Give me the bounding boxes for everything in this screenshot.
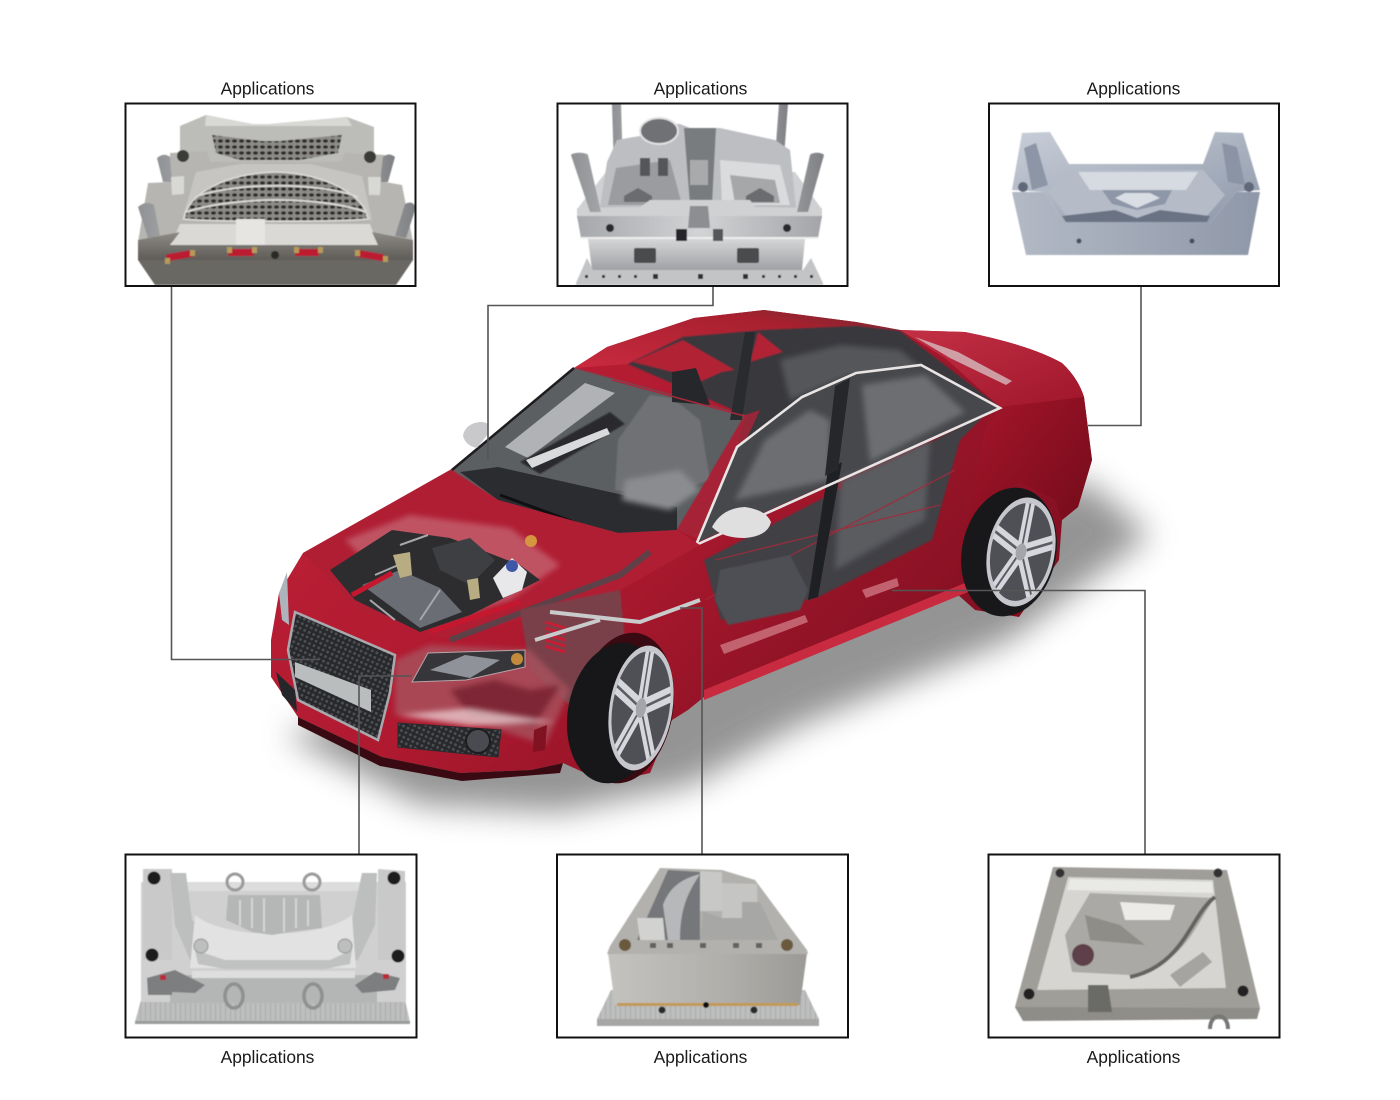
brass fittings xyxy=(165,247,388,264)
main platform xyxy=(138,151,413,242)
mold image xyxy=(135,869,410,1024)
lower block xyxy=(170,975,377,1003)
panel: top right bumper mold xyxy=(989,78,1279,286)
lower door trim xyxy=(720,578,899,654)
corner bushes xyxy=(619,939,631,951)
bumper glow xyxy=(398,708,555,726)
grille xyxy=(288,612,395,740)
frame xyxy=(126,104,416,286)
cabin dark interior behind roof xyxy=(628,326,1000,447)
seam xyxy=(580,237,818,239)
lower slide xyxy=(170,224,378,247)
coolant tank xyxy=(493,558,527,598)
rear headrest and bench xyxy=(780,345,960,400)
heading: Applications xyxy=(654,78,748,98)
roof xyxy=(574,310,900,368)
frame xyxy=(989,104,1279,286)
bolt holes xyxy=(783,224,791,232)
mold image xyxy=(1012,132,1260,255)
hub xyxy=(634,697,648,719)
white backdrop xyxy=(126,104,415,285)
big grille xyxy=(184,172,368,221)
connector bottom left xyxy=(359,676,412,854)
top face strip xyxy=(205,115,352,126)
base plate xyxy=(597,990,819,1026)
frame xyxy=(558,104,848,286)
coil spring xyxy=(545,622,565,652)
lower eye bolts xyxy=(225,984,243,1008)
recess pockets xyxy=(640,158,668,176)
right recess xyxy=(730,175,780,203)
cavity xyxy=(1048,170,1225,218)
centre column xyxy=(684,128,716,205)
top face xyxy=(607,868,808,954)
inner cavity xyxy=(1037,877,1226,990)
front lower face xyxy=(138,260,413,285)
front guide pillars xyxy=(571,153,824,212)
block face xyxy=(608,953,807,1005)
left headlamp sliver xyxy=(279,572,289,625)
hood xyxy=(303,470,700,640)
panel: bottom middle tall mold xyxy=(557,854,848,1038)
plate bolts xyxy=(750,1006,758,1014)
plate edge xyxy=(597,1019,819,1026)
hood cutaway fade xyxy=(345,515,560,625)
mold image xyxy=(597,868,819,1026)
rear quarter panel xyxy=(960,397,1092,560)
windscreen interior xyxy=(452,368,745,533)
block front xyxy=(1012,192,1260,255)
front corner vents xyxy=(533,725,547,752)
platform sides xyxy=(578,172,821,208)
bumper core xyxy=(190,915,356,968)
intake manifold xyxy=(362,570,462,628)
A-pillar red xyxy=(677,410,760,540)
bolt holes xyxy=(146,948,158,962)
panel: bottom right door mold xyxy=(988,854,1280,1038)
connector top left xyxy=(172,286,318,660)
amber indicator xyxy=(511,653,523,665)
cowl lines xyxy=(450,552,650,640)
front upper face xyxy=(138,232,413,260)
rear spoke gaps xyxy=(985,498,1059,597)
square cut-outs xyxy=(713,229,723,241)
red cylinder xyxy=(356,250,384,261)
bumper side mesh xyxy=(276,672,297,712)
red roof patches seen through glass xyxy=(632,332,783,382)
door frame pillar xyxy=(808,462,842,600)
panel: top middle dashboard mold xyxy=(558,78,848,286)
rear window strip xyxy=(915,337,1012,385)
connector bottom middle xyxy=(680,608,702,854)
rear alloy wheel xyxy=(980,495,1062,609)
connector lines xyxy=(172,286,1145,854)
B-pillar through glass xyxy=(825,378,850,476)
front tyre xyxy=(555,634,675,792)
curved highlight xyxy=(663,874,700,940)
corner holes xyxy=(1244,182,1254,192)
red cylinder xyxy=(228,249,254,256)
mold image xyxy=(570,104,824,285)
upper recess xyxy=(226,895,322,935)
core inner right xyxy=(720,160,790,205)
base holes xyxy=(585,274,813,279)
inner structure xyxy=(450,680,560,725)
side window white frame xyxy=(696,365,1000,545)
door core xyxy=(1065,893,1215,975)
purple insert xyxy=(1072,944,1094,966)
heading: Applications xyxy=(221,78,315,98)
corner bores xyxy=(1056,868,1064,878)
main block xyxy=(141,882,406,1002)
windscreen frame xyxy=(452,368,574,470)
left post recess xyxy=(1024,143,1048,190)
dark window recess xyxy=(1085,915,1145,945)
top inner wall xyxy=(1067,879,1213,893)
bumper left wing xyxy=(170,873,225,965)
car shadow xyxy=(285,480,1150,812)
eye bolts top xyxy=(227,874,243,890)
plate bolts xyxy=(703,1002,709,1008)
red engine pipes xyxy=(352,573,520,632)
lower slot trim xyxy=(195,950,352,969)
cavity highlight xyxy=(1078,172,1198,190)
door rear seat glimpse xyxy=(835,440,930,570)
frame xyxy=(988,854,1280,1038)
cavity shadow xyxy=(637,870,700,940)
soft mold artwork xyxy=(571,104,824,285)
core surround xyxy=(600,124,796,208)
lighter column detail xyxy=(690,160,708,185)
lower bumper lip xyxy=(298,717,563,781)
right mirror xyxy=(712,507,771,538)
handling slot xyxy=(634,248,656,263)
corner posts xyxy=(143,869,405,960)
caption bottom middle: Applications xyxy=(654,1047,748,1067)
mold image xyxy=(126,104,416,285)
corner holes xyxy=(1018,182,1028,192)
caption bottom left: Applications xyxy=(221,1047,315,1067)
base plate xyxy=(135,1000,410,1022)
spoke gaps xyxy=(607,647,677,758)
connector top middle xyxy=(488,286,713,460)
soft mold artwork xyxy=(138,115,416,285)
bolt holes xyxy=(177,150,189,162)
rear guide pillars xyxy=(611,104,788,148)
grille bars xyxy=(186,186,366,212)
side step xyxy=(722,883,758,920)
spokes xyxy=(607,647,677,758)
centre pillar xyxy=(730,332,755,420)
left step xyxy=(637,918,665,940)
central emblem recess xyxy=(1102,190,1172,210)
number plate xyxy=(295,662,371,712)
rocker highlight strip xyxy=(704,583,968,700)
suspension area xyxy=(520,590,625,710)
panel: bottom left bumper mold xyxy=(126,854,416,1038)
white backdrop xyxy=(558,104,847,285)
slide centre xyxy=(236,219,265,245)
centre insert xyxy=(688,206,710,228)
chevron lip xyxy=(1115,193,1160,208)
dark cavity base xyxy=(1062,210,1210,222)
bolt holes xyxy=(148,872,160,884)
bolt holes xyxy=(606,224,614,232)
brass strip xyxy=(617,1003,798,1006)
top cross bar xyxy=(186,882,362,891)
side windows glass xyxy=(696,365,1000,543)
plate front edge xyxy=(135,1021,410,1024)
fog lamp recesses xyxy=(194,939,208,953)
blue cap xyxy=(506,560,518,572)
rear guide pillars xyxy=(157,154,395,182)
eye bolts top xyxy=(304,874,320,890)
face holes xyxy=(1076,238,1082,244)
red cylinder xyxy=(166,250,194,261)
eye bolt xyxy=(1210,1016,1228,1029)
headrest xyxy=(672,368,710,405)
rear hub xyxy=(1014,543,1028,561)
headlight xyxy=(412,650,525,682)
corner bores xyxy=(1238,986,1248,996)
rear tyre xyxy=(950,479,1068,625)
heading: Applications xyxy=(1087,78,1181,98)
frame xyxy=(557,854,848,1038)
centre gate xyxy=(271,251,279,259)
fog lamp xyxy=(466,729,490,753)
lower air intake xyxy=(398,723,501,757)
mid block face xyxy=(577,216,822,238)
slide unit xyxy=(1088,985,1112,1012)
dark roll bar xyxy=(520,412,625,474)
top surface xyxy=(1012,132,1260,223)
dome xyxy=(640,118,678,144)
engine bay xyxy=(330,530,540,632)
control arms xyxy=(535,600,700,640)
illustration: red sedan cutaway xyxy=(271,310,1092,792)
lower core pockets xyxy=(624,188,774,202)
outer block xyxy=(1015,867,1260,1020)
engine cover xyxy=(432,538,495,585)
curved rail xyxy=(1130,897,1215,977)
yellow cap xyxy=(525,535,537,547)
rear spokes xyxy=(985,498,1059,597)
corner bushes xyxy=(781,939,793,951)
corner bores xyxy=(1214,868,1222,878)
inner lighter surface xyxy=(182,164,372,220)
mid block top xyxy=(577,200,822,218)
front alloy wheel xyxy=(602,644,680,772)
red markers xyxy=(160,974,389,980)
rear block xyxy=(180,115,374,165)
core inner left xyxy=(608,160,682,205)
tall rib xyxy=(700,871,722,911)
bolt holes xyxy=(388,872,400,884)
recess xyxy=(700,902,778,940)
red roof edge seen through glass xyxy=(612,380,748,417)
core light patch xyxy=(1120,902,1175,920)
dashboard xyxy=(460,467,677,533)
A-pillar silver area xyxy=(505,383,615,458)
mold image xyxy=(1015,867,1260,1029)
bolt holes xyxy=(392,950,404,962)
bolt row xyxy=(650,943,762,948)
panel: top left grille mold xyxy=(126,78,416,286)
windscreen wiper xyxy=(500,495,590,528)
headlight details xyxy=(430,655,500,678)
face holes xyxy=(1190,238,1194,244)
front seat xyxy=(615,395,710,497)
car body shell xyxy=(271,310,1092,783)
frame xyxy=(126,854,416,1038)
left mirror xyxy=(463,422,488,448)
connector top right xyxy=(1088,286,1141,426)
engine highlights xyxy=(370,535,440,620)
bolt holes xyxy=(364,151,376,163)
connector bottom right xyxy=(892,590,1145,854)
right post recess xyxy=(1222,143,1245,185)
handling slot xyxy=(737,248,759,263)
corner bores xyxy=(1024,988,1034,1000)
lower bar xyxy=(192,971,355,978)
rear grille xyxy=(212,135,342,160)
fog lamp recesses xyxy=(338,939,352,953)
lower eye bolts xyxy=(304,984,322,1008)
caption bottom right: Applications xyxy=(1087,1047,1181,1067)
slats xyxy=(240,898,308,932)
square cut-outs xyxy=(676,229,687,241)
ribbed patch xyxy=(1170,952,1212,987)
plate bolts xyxy=(658,1006,666,1014)
front face xyxy=(1015,1007,1260,1021)
angle blocks xyxy=(171,176,381,195)
silver roll-bar highlight xyxy=(526,428,610,468)
lower block xyxy=(588,239,805,270)
red door reinforcement lines xyxy=(705,470,955,600)
base plate xyxy=(576,258,823,285)
front guide pillars xyxy=(138,203,416,238)
red cylinder xyxy=(295,249,319,256)
front wheel arch xyxy=(565,625,685,791)
right lifter mech xyxy=(355,972,400,993)
left lifter mech xyxy=(147,970,205,995)
rear deck xyxy=(900,330,1084,407)
translucent front fender xyxy=(395,645,570,745)
brass throttle parts xyxy=(393,552,480,600)
door seats through door xyxy=(715,555,808,625)
bumper right wing xyxy=(325,873,377,965)
seat cushion xyxy=(622,470,700,510)
door opening interior xyxy=(704,415,985,620)
side window seats xyxy=(735,375,965,500)
